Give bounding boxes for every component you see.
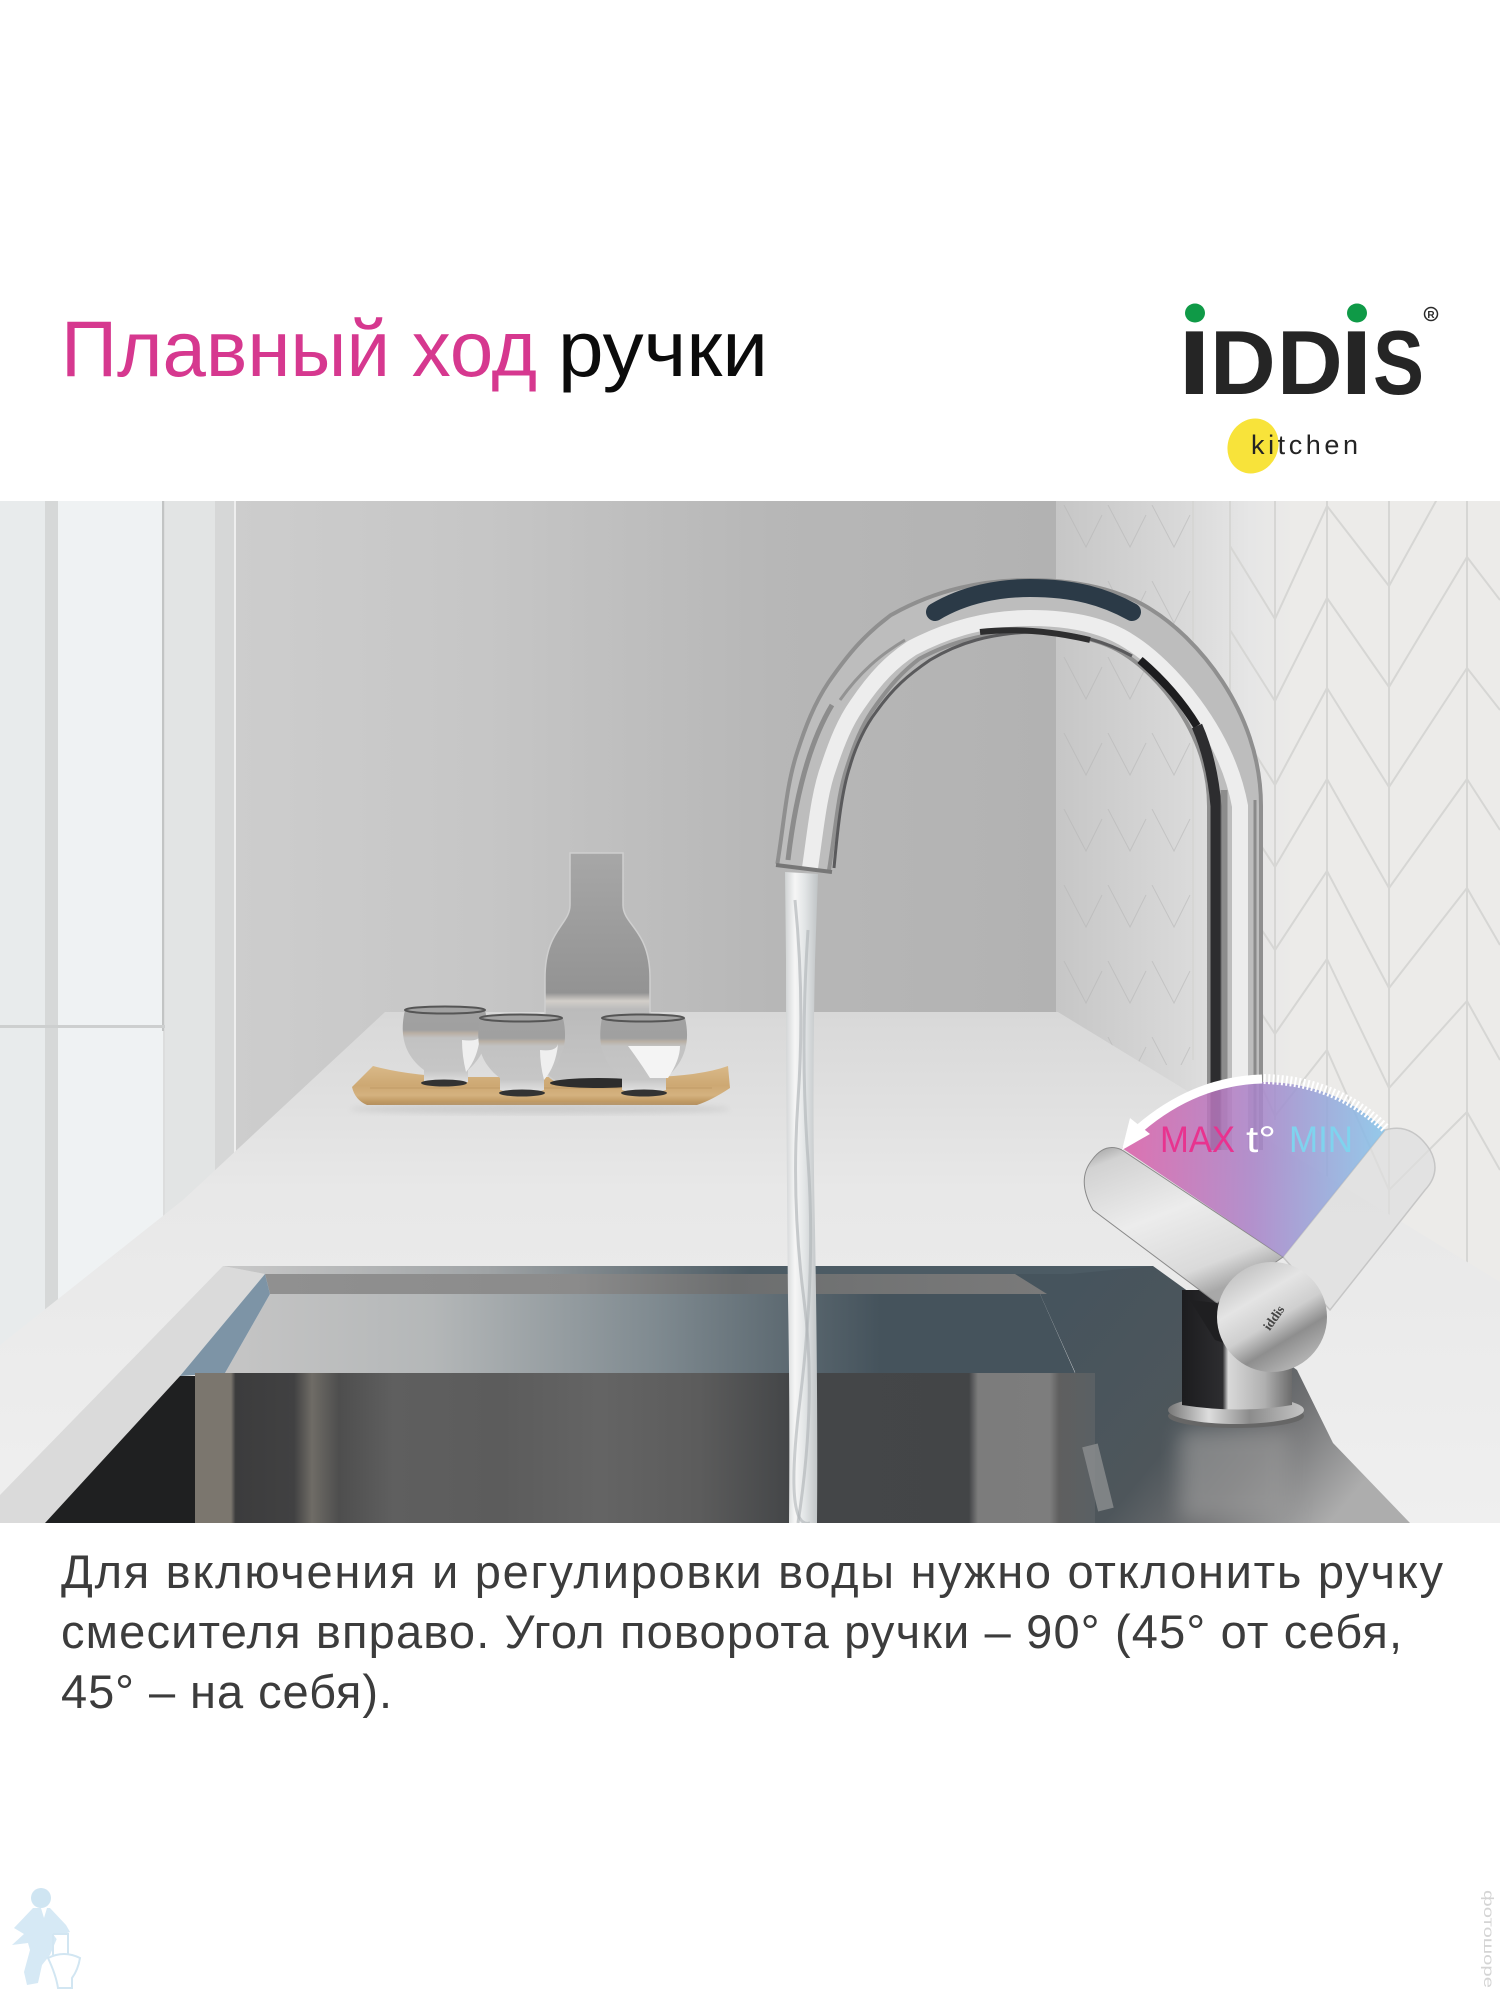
sink bevel strip xyxy=(0,1266,265,1523)
logo wordmark: I xyxy=(1178,312,1211,414)
sink xyxy=(0,1266,1410,1523)
logo: iddis kitchen xyxy=(1178,304,1438,482)
temperature labels: MAX xyxy=(1160,1119,1235,1160)
tick arc and arrow xyxy=(1122,1079,1385,1150)
wooden tray xyxy=(352,1066,730,1105)
icon: plumber with toilet xyxy=(12,1888,80,1988)
carafe xyxy=(545,853,650,1086)
spout body layers xyxy=(803,606,1235,1150)
faucet base and handle: iddis xyxy=(1260,1302,1287,1333)
title xyxy=(61,304,768,393)
sink dark steel slope xyxy=(1000,1266,1410,1523)
sink brushed steel wall xyxy=(195,1373,1095,1523)
glass middle xyxy=(478,1014,565,1096)
handle ball xyxy=(1217,1262,1327,1372)
faucet base and handle xyxy=(1084,1128,1435,1520)
logo wordmark: S xyxy=(1373,312,1424,413)
water stream xyxy=(785,872,818,1523)
handle arm xyxy=(1084,1148,1283,1303)
description text: смесителя вправо. Угол поворота ручки – 90° (45° от себя, xyxy=(61,1605,1402,1658)
temperature labels: t° xyxy=(1246,1119,1276,1160)
watermark text: фотошоре xyxy=(1481,1890,1497,1988)
title: Плавный ход xyxy=(61,304,537,393)
sink black corner xyxy=(45,1376,196,1523)
countertop xyxy=(0,1012,1500,1523)
faucet neck xyxy=(1182,1290,1292,1410)
description text: 45° – на себя). xyxy=(61,1665,392,1718)
tile grooves xyxy=(1229,501,1500,1262)
faucet base plate xyxy=(1168,1402,1304,1428)
sink top rim xyxy=(224,1266,1000,1274)
logo wordmark: I xyxy=(1340,312,1373,414)
temperature labels: MIN xyxy=(1289,1119,1353,1160)
logo wordmark: D xyxy=(1210,313,1276,414)
fan sector xyxy=(1122,1082,1385,1257)
glass left xyxy=(403,1006,487,1086)
logo: iddis kitchen: R xyxy=(1427,310,1435,321)
toilet xyxy=(48,1934,80,1988)
description text xyxy=(61,1545,1444,1718)
tray with glasses and carafe xyxy=(350,853,730,1114)
description text: Для включения и регулировки воды нужно отклонить ручку xyxy=(61,1545,1444,1598)
window with curtains xyxy=(0,501,236,1401)
temperature labels xyxy=(1162,1126,1350,1152)
tiled wall xyxy=(1056,445,1500,1301)
gooseneck spout xyxy=(776,588,1255,1150)
glass right xyxy=(600,1014,687,1096)
sink back wall strip xyxy=(265,1274,1047,1294)
spout tip xyxy=(776,865,832,872)
faucet reflection xyxy=(1180,1430,1290,1520)
ghost handle position xyxy=(1283,1128,1435,1310)
kitchen scene photo xyxy=(0,445,1500,1523)
spout inner dark edge xyxy=(834,632,1132,868)
logo wordmark: D xyxy=(1277,313,1343,414)
sink blue corner xyxy=(180,1274,270,1376)
sink floor band xyxy=(225,1294,1075,1373)
title: ручки xyxy=(558,304,768,393)
back wall xyxy=(236,501,1056,1150)
logo wordmark xyxy=(1178,312,1424,414)
temperature fan diagram xyxy=(1122,1079,1385,1257)
logo: iddis kitchen: kitchen xyxy=(1251,430,1358,460)
spout dark reflection xyxy=(935,588,1132,612)
